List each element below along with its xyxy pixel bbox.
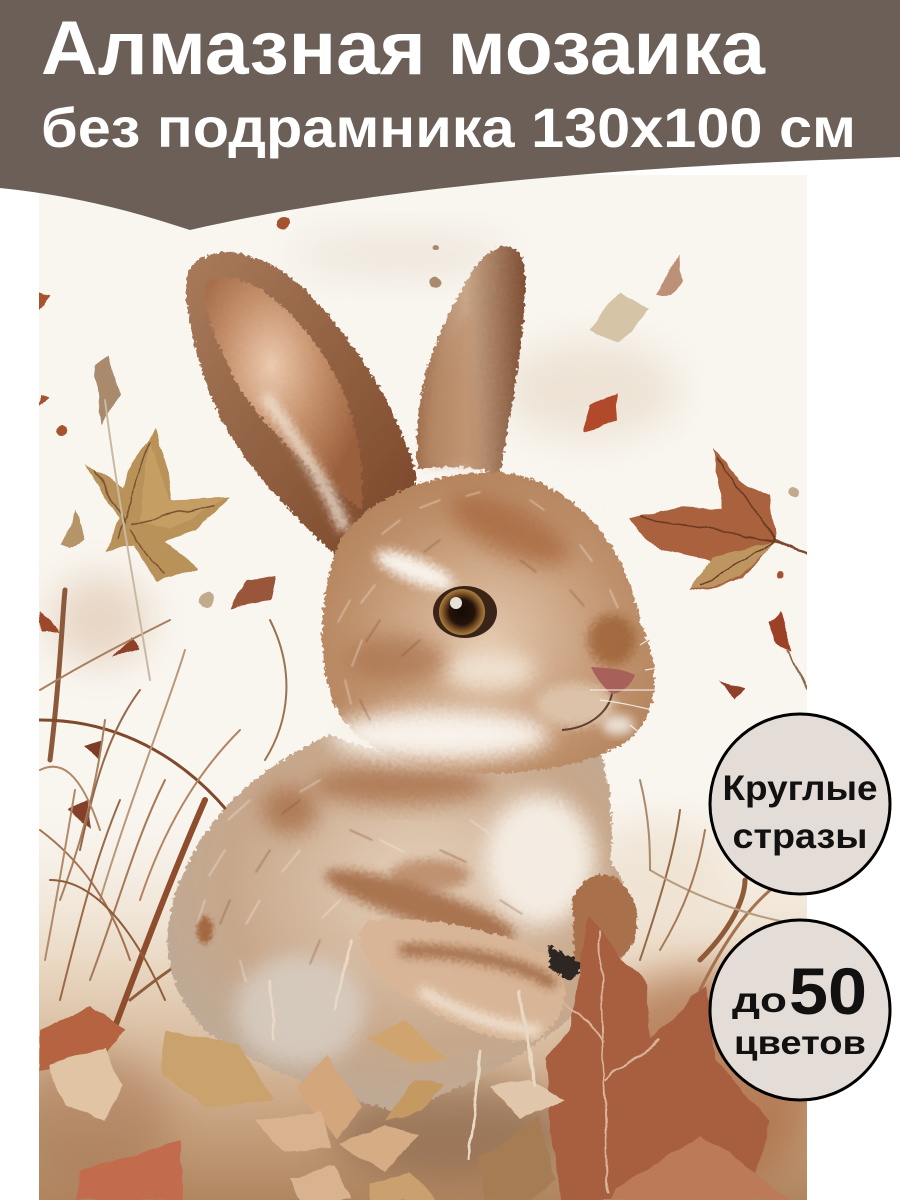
leaf lower left (160, 1030, 275, 1108)
badge: up to 50 colours: 50 (789, 954, 867, 1028)
rabbit eye (433, 586, 497, 638)
leaf: red small (582, 393, 617, 432)
leaf: top right small (588, 292, 650, 345)
badge: round rhinestones: Круглые (722, 769, 878, 808)
scattered autumn leaves (39, 216, 806, 830)
leaf: right edge red (768, 610, 792, 652)
big red leaf (545, 915, 770, 1200)
grass right (639, 779, 782, 992)
title: Алмазная мозаика (41, 6, 766, 91)
rabbit (168, 246, 654, 1110)
leaf: mid left small (230, 575, 275, 607)
header banner (0, 0, 900, 230)
red leaf lower right (610, 1135, 790, 1200)
rabbit whiskers (589, 518, 655, 732)
rabbit front paw (360, 919, 565, 1041)
rabbit nose (591, 667, 635, 694)
rabbit body (168, 735, 630, 1110)
rabbit fur strokes (197, 492, 618, 982)
grass left (40, 400, 286, 1040)
badge: round rhinestones: стразы (732, 817, 868, 856)
rabbit face detail (433, 518, 655, 741)
leaf: left maple (85, 428, 230, 582)
badge: up to 50 colours: цветов (734, 1024, 866, 1061)
badge: up to 50 colours: до (732, 981, 787, 1020)
rabbit back paw (572, 875, 637, 965)
dots (278, 216, 290, 228)
foreground leaves (40, 915, 790, 1200)
picture background (10, 175, 820, 1200)
badge: round rhinestones (710, 714, 890, 894)
leaf: right maple (628, 447, 806, 592)
dry stems (270, 940, 535, 1160)
artwork (10, 175, 820, 1200)
rabbit head (322, 472, 654, 773)
subtitle: без подрамника 130х100 см (41, 96, 856, 159)
brown leaf bottom (480, 1115, 555, 1200)
tan leaf centre (365, 1020, 450, 1062)
badge: up to 50 colours (710, 920, 890, 1100)
rabbit left ear (186, 252, 418, 560)
rabbit right ear (417, 246, 525, 475)
leaf cluster bottom centre (298, 1055, 362, 1140)
